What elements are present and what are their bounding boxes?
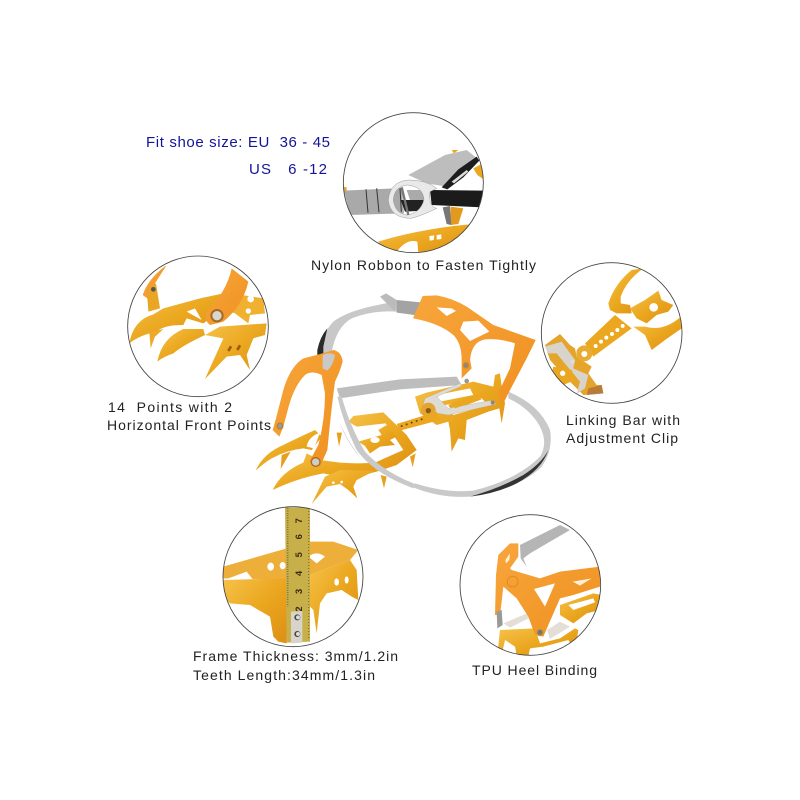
infographic canvas — [108, 112, 682, 683]
label: front points: 14 Points with 2 — [108, 399, 232, 415]
label: front points — [107, 399, 271, 433]
label: linking bar: Adjustment Clip — [566, 430, 678, 446]
label: front points: Horizontal Front Points — [107, 417, 271, 433]
toe binding orange — [273, 350, 343, 467]
toe frame — [348, 412, 417, 472]
label: heel binding: TPU Heel Binding — [472, 662, 597, 678]
rear frame — [415, 373, 505, 452]
main crampon illustration — [256, 293, 551, 504]
label: frame thickness: Teeth Length:34mm/1.3in — [193, 667, 375, 683]
shoe size text: Fit shoe size: EU 36 - 45 — [146, 134, 330, 151]
strap behind — [337, 377, 462, 398]
label: frame thickness: Frame Thickness: 3mm/1.2in — [193, 648, 398, 664]
shoe size text: US 6 -12 — [249, 161, 327, 178]
front teeth small — [281, 433, 416, 488]
linking bar — [397, 412, 440, 431]
panel: heel binding detail — [460, 515, 602, 657]
panel: frame thickness detail: 4 — [294, 570, 304, 576]
label: frame thickness — [193, 648, 398, 683]
strap in front of toe frame — [337, 397, 415, 488]
shoe size text — [146, 134, 330, 178]
panel: frame thickness detail: 7 — [294, 518, 304, 523]
label: nylon ribbon: Nylon Robbon to Fasten Tightly — [311, 257, 536, 273]
panel: frame thickness detail: 5 — [294, 552, 304, 557]
heel binding orange — [413, 295, 536, 403]
panel: nylon ribbon detail — [343, 113, 487, 253]
panel: frame thickness detail: 3 — [294, 589, 304, 594]
label: linking bar: Linking Bar with — [566, 412, 680, 428]
panel: frame thickness detail: 2 — [294, 606, 304, 612]
label: linking bar — [566, 412, 680, 446]
panel: front points detail — [128, 256, 268, 397]
panel: frame thickness detail — [223, 507, 363, 647]
panel: frame thickness detail: 6 — [294, 534, 304, 539]
panel: linking bar detail — [541, 263, 682, 403]
